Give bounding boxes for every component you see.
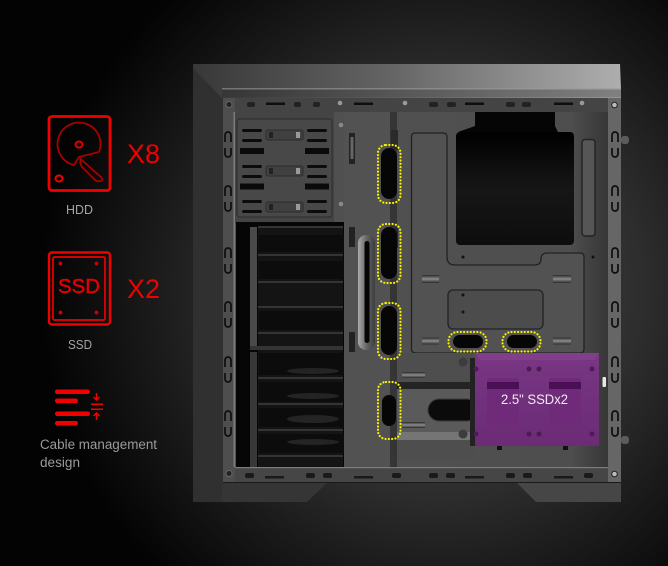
cable holes with yellow dotted outlines (378, 145, 540, 439)
middle panel (344, 112, 398, 467)
cable channel (358, 235, 375, 350)
frame slots left (225, 132, 231, 436)
bottom inner strip (235, 467, 608, 482)
top strip slots (247, 102, 573, 107)
label: SSD: SSD (68, 338, 92, 352)
right panel details (412, 112, 595, 353)
bottom strip slots (245, 473, 593, 478)
label: X8: X8 (127, 139, 160, 169)
computer case (193, 64, 629, 502)
right foot (517, 483, 621, 502)
label: 2.5 inch SSD x2: 2.5" SSDx2 (501, 391, 568, 407)
lower middle bracket (397, 353, 478, 460)
icon: HDD (49, 116, 110, 190)
left frame (193, 64, 223, 502)
drive bays (236, 222, 344, 467)
screws (226, 101, 629, 477)
left frame strip (223, 98, 235, 482)
label: HDD: HDD (66, 203, 93, 217)
top inner strip (235, 98, 608, 112)
icon: SSD: SSD (58, 276, 100, 298)
left foot (222, 483, 327, 502)
label: cable management design: design (40, 455, 80, 470)
label: cable management design: Cable management (40, 437, 157, 452)
icon: cable management (55, 390, 103, 426)
top panel (193, 64, 621, 98)
icon: SSD (49, 252, 110, 324)
right frame strip (608, 98, 621, 482)
frame slots right (612, 132, 618, 436)
SSD bracket highlight (474, 353, 599, 446)
label: X2: X2 (127, 274, 160, 304)
drive cage plate (235, 112, 345, 224)
back panel (235, 112, 608, 467)
